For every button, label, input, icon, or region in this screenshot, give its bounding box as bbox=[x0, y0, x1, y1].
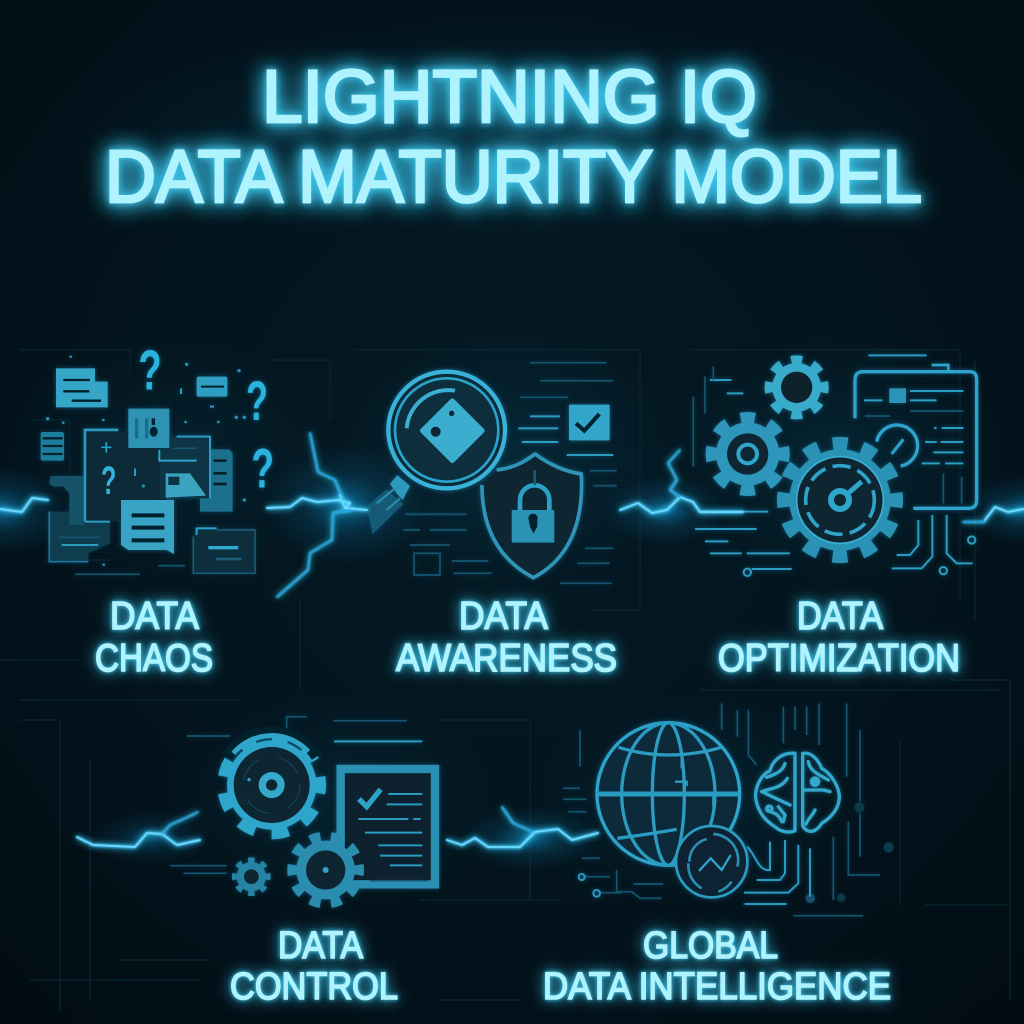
label: data awareness: DATA bbox=[459, 595, 548, 638]
label: data chaos: CHAOS bbox=[95, 637, 213, 680]
label: data awareness: AWARENESS bbox=[396, 637, 617, 680]
icon: scattered documents and question marks: ? bbox=[101, 459, 116, 503]
label: data optimization: OPTIMIZATION bbox=[718, 637, 960, 680]
title: LIGHTNING IQ bbox=[262, 55, 757, 138]
icon: scattered documents and question marks: ? bbox=[246, 369, 268, 432]
icon: gears, gauge and dashboard bbox=[693, 355, 977, 576]
icon: gears and checklist bbox=[170, 717, 435, 903]
label: data chaos: DATA bbox=[110, 595, 199, 638]
icon: scattered documents and question marks: ? bbox=[251, 436, 274, 499]
gear: top small bbox=[769, 359, 825, 415]
label: data control bbox=[230, 925, 398, 1008]
gear: large bbox=[223, 732, 320, 834]
gear: large gauge bbox=[784, 444, 896, 556]
icon: scattered documents and question marks bbox=[41, 339, 274, 574]
label: data control: DATA bbox=[278, 925, 364, 967]
lightning bolts bbox=[0, 433, 1024, 847]
label: data chaos bbox=[95, 595, 213, 680]
gear: medium bbox=[292, 837, 359, 903]
title: DATA MATURITY MODEL bbox=[105, 135, 922, 218]
panel: data awareness bbox=[367, 363, 617, 680]
panel: data chaos bbox=[41, 339, 274, 680]
label: global data intelligence: GLOBAL bbox=[643, 925, 778, 967]
label: data optimization bbox=[718, 595, 960, 680]
gear: left medium bbox=[712, 418, 784, 490]
label: global data intelligence bbox=[543, 925, 891, 1008]
gear: small bbox=[235, 860, 268, 893]
label: global data intelligence: DATA INTELLIGENCE bbox=[543, 966, 891, 1008]
brain bbox=[756, 753, 839, 832]
panel: data optimization bbox=[693, 355, 977, 680]
label: data control: CONTROL bbox=[230, 966, 398, 1008]
lightning glows bbox=[0, 445, 1024, 870]
icon: globe, brain and analytics bbox=[563, 703, 894, 916]
label: data awareness bbox=[396, 595, 617, 680]
panel: data control bbox=[170, 717, 435, 1008]
panel: global data intelligence bbox=[543, 703, 894, 1008]
title bbox=[105, 55, 922, 218]
icon: scattered documents and question marks: ? bbox=[138, 339, 162, 402]
label: data optimization: DATA bbox=[797, 595, 883, 638]
icon: magnifier, shield, checklist bbox=[367, 363, 617, 583]
